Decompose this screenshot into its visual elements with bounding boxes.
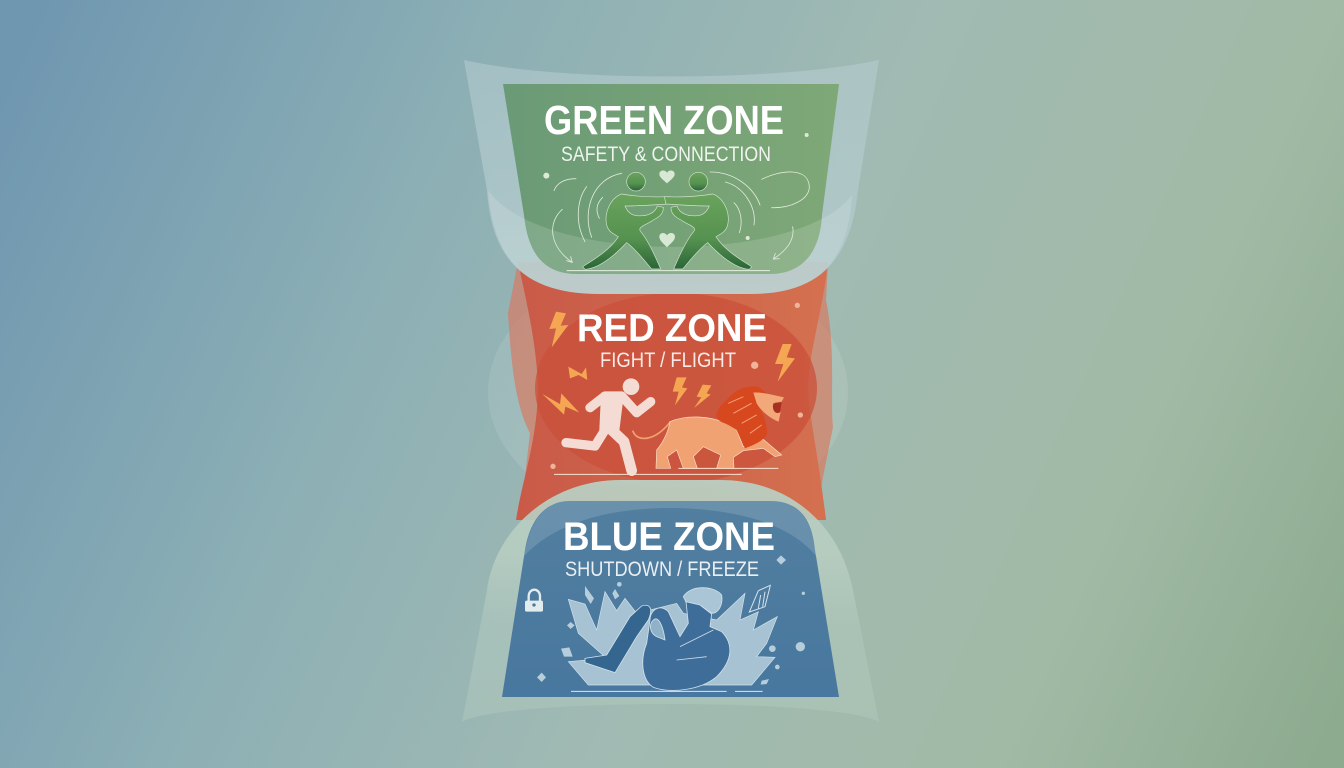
dots	[543, 133, 809, 240]
icon: ice shards	[568, 592, 777, 685]
red zone subtitle: FIGHT / FLIGHT	[600, 349, 736, 372]
panel: red zone	[488, 262, 848, 522]
blue zone glass frame	[462, 480, 879, 722]
red zone illustration	[542, 303, 803, 474]
blue zone illustration	[525, 555, 805, 691]
green zone title: GREEN ZONE	[544, 97, 784, 143]
icon: hearts	[659, 171, 675, 247]
icon: padlock	[525, 590, 543, 612]
green zone panel	[503, 84, 839, 274]
green zone lower glass band	[488, 190, 852, 294]
icon: lion	[633, 386, 784, 468]
panel: blue zone	[462, 480, 879, 722]
green zone illustration	[543, 133, 809, 271]
green zone subtitle: SAFETY & CONNECTION	[561, 143, 771, 166]
blue zone subtitle: SHUTDOWN / FREEZE	[565, 558, 759, 581]
red zone inner ellipse	[535, 293, 817, 483]
blue zone upper glass band	[524, 501, 816, 556]
ground lines	[554, 468, 778, 474]
icon: lightning bolts	[542, 312, 795, 415]
icon: window shard	[749, 585, 770, 612]
dots	[550, 303, 803, 469]
red zone halo	[488, 262, 848, 522]
panel: green zone	[464, 60, 879, 294]
green zone glass frame	[464, 60, 879, 294]
ground lines	[571, 690, 763, 693]
icon: curled up person	[585, 588, 730, 690]
red zone main panel	[516, 262, 828, 520]
blue zone panel	[502, 501, 839, 697]
ground line	[567, 269, 770, 272]
red zone outer hourglass	[508, 262, 833, 520]
icon: two people pushing	[583, 172, 752, 269]
floating ice bits	[537, 555, 805, 685]
motion lines	[553, 172, 809, 262]
icon: runner	[566, 378, 651, 471]
blue zone title: BLUE ZONE	[563, 515, 775, 559]
red zone title: RED ZONE	[577, 307, 767, 350]
